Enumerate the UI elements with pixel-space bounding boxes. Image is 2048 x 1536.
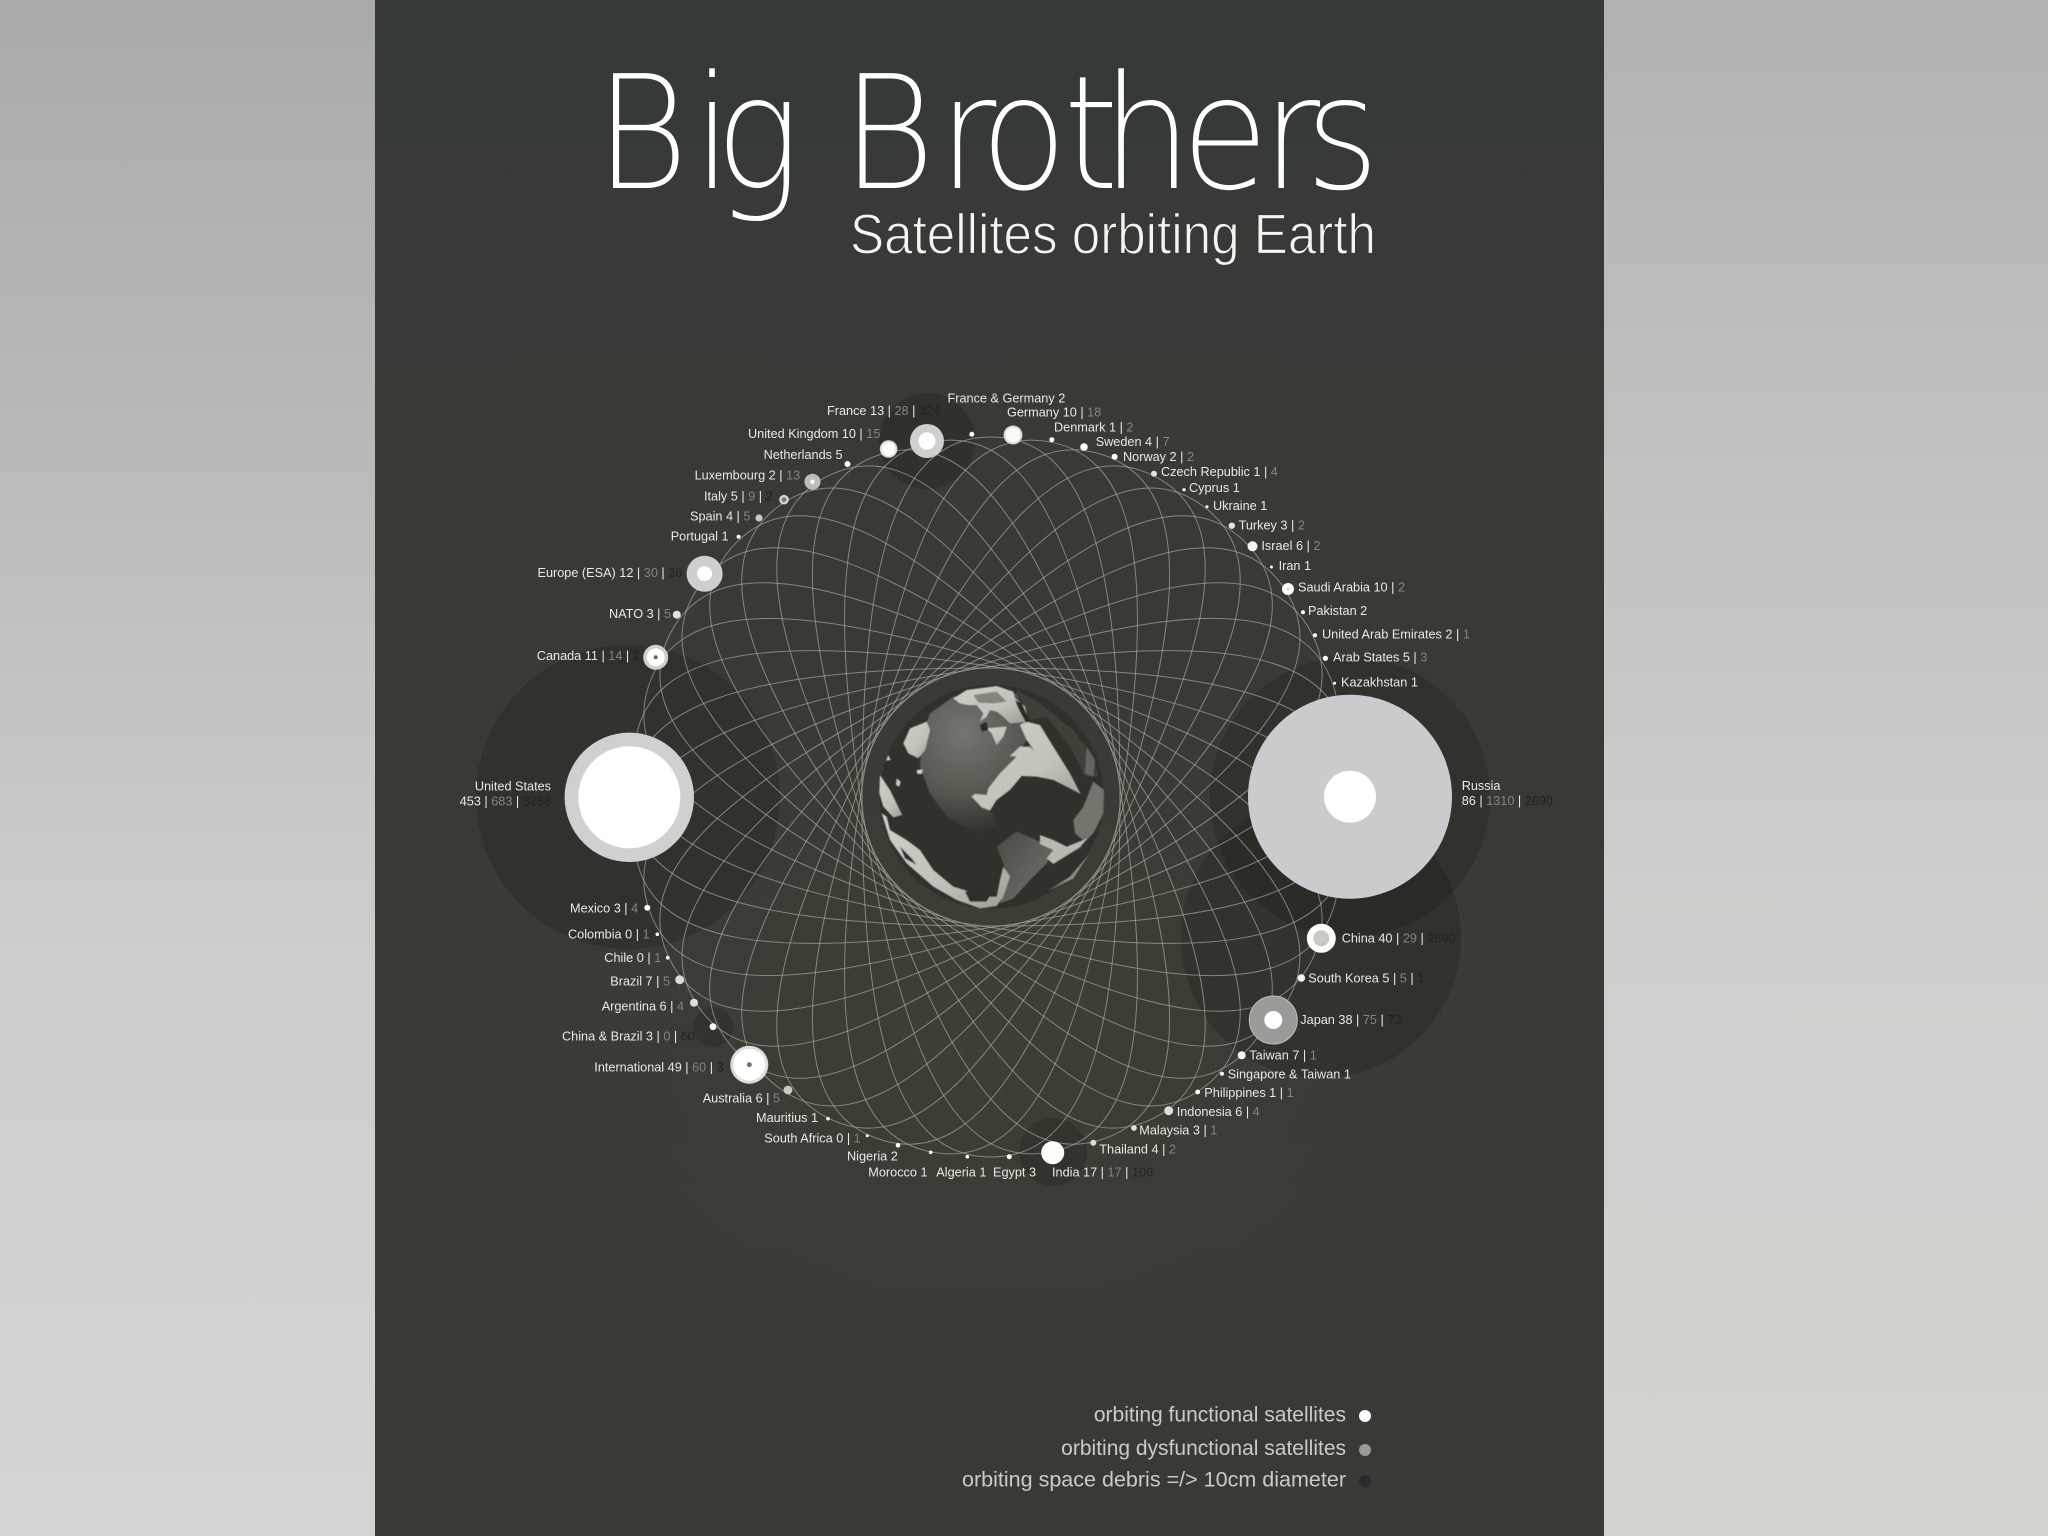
satellite: Singapore and Taiwan: Singapore & Taiwan 1 [1228, 1067, 1351, 1081]
satellite: Thailand: Thailand 4 | 2 [1099, 1142, 1176, 1156]
legend [962, 1404, 1371, 1492]
left backdrop [0, 0, 376, 1536]
satellite: India [1041, 1141, 1153, 1180]
satellite: China and Brazil [562, 1023, 716, 1044]
satellite: Algeria: Algeria 1 [936, 1166, 986, 1180]
title: Big Brothers [595, 41, 1380, 226]
earth globe [879, 685, 1104, 909]
panel glow [470, 580, 1510, 1420]
satellite: Japan: Japan 38 | 75 | 73 [1300, 1013, 1401, 1027]
satellite: International [594, 1046, 768, 1084]
satellite: NATO: NATO 3 | 5 [609, 607, 671, 621]
satellite: United Arab Emirates: United Arab Emirates 2 | 1 [1322, 627, 1470, 641]
satellite: Europe (ESA): Europe (ESA) 12 | 30 | 36 [538, 566, 682, 580]
satellite: Algeria [936, 1155, 986, 1180]
poster panel [375, 0, 1604, 1536]
satellite: China [1307, 924, 1456, 953]
satellite: Israel: Israel 6 | 2 [1261, 539, 1320, 553]
satellite: Brazil: Brazil 7 | 5 [610, 974, 670, 988]
legend: debris: orbiting space debris =/> 10cm diameter [962, 1469, 1346, 1492]
satellite: Nigeria [847, 1143, 900, 1163]
satellite: Colombia: Colombia 0 | 1 [568, 928, 650, 942]
satellite: Indonesia: Indonesia 6 | 4 [1177, 1105, 1260, 1119]
right backdrop [1603, 0, 2048, 1536]
satellite: Denmark: Denmark 1 | 2 [1054, 421, 1133, 435]
satellite: France and Germany: France & Germany 2 [948, 391, 1065, 405]
satellite: France and Germany [948, 391, 1065, 437]
satellite: United States [460, 733, 694, 862]
satellite: Luxembourg [695, 469, 820, 490]
satellite: United Kingdom: United Kingdom 10 | 15 [748, 427, 880, 441]
satellite: Canada [537, 645, 668, 670]
satellite: United Kingdom [748, 427, 897, 458]
satellite: Cyprus: Cyprus 1 [1189, 481, 1240, 495]
satellite: Portugal: Portugal 1 [671, 530, 729, 544]
satellite: China and Brazil: China & Brazil 3 | 0 | 60 [562, 1030, 695, 1044]
satellite: Russia: Russia [1462, 779, 1501, 793]
orbit rosette [609, 415, 1373, 1179]
satellite: Czech Republic: Czech Republic 1 | 4 [1161, 465, 1278, 479]
satellite: Saudi Arabia: Saudi Arabia 10 | 2 [1298, 580, 1405, 594]
satellite: Netherlands: Netherlands 5 [764, 448, 843, 462]
satellite: France [827, 404, 944, 458]
satellite: Mauritius: Mauritius 1 [756, 1111, 818, 1125]
satellite: Egypt [993, 1154, 1036, 1180]
satellite: South Korea: South Korea 5 | 5 | 1 [1308, 971, 1424, 985]
satellite: Arab States: Arab States 5 | 3 [1333, 650, 1427, 664]
satellite: Pakistan: Pakistan 2 [1308, 604, 1367, 618]
satellite: Denmark [1049, 421, 1133, 442]
satellite: Europe (ESA) [538, 556, 723, 592]
satellite: France: France 13 | 28 | 324 [827, 404, 940, 418]
satellite: Russia: 86 | 1310 | 2690 [1462, 794, 1553, 808]
satellite: China: China 40 | 29 | 2690 [1342, 932, 1456, 946]
satellite: Mexico: Mexico 3 | 4 [570, 901, 638, 915]
satellite: Sweden: Sweden 4 | 7 [1096, 435, 1170, 449]
satellite: Nigeria: Nigeria 2 [847, 1149, 898, 1163]
satellite: Russia [1248, 695, 1553, 899]
satellite: United States: United States [475, 780, 551, 794]
legend: functional: orbiting functional satellites [1094, 1404, 1346, 1427]
satellite: Philippines: Philippines 1 | 1 [1204, 1086, 1294, 1100]
satellite: Morocco [868, 1150, 932, 1180]
satellite: Turkey: Turkey 3 | 2 [1239, 518, 1305, 532]
satellite: International: International 49 | 60 | 3 [594, 1061, 724, 1075]
satellite: Taiwan: Taiwan 7 | 1 [1249, 1049, 1317, 1063]
satellite: Canada: Canada 11 | 14 | 2 [537, 649, 640, 663]
satellite: Malaysia: Malaysia 3 | 1 [1139, 1123, 1217, 1137]
subtitle: Satellites orbiting Earth [850, 202, 1376, 266]
satellite: Egypt: Egypt 3 [993, 1166, 1036, 1180]
satellite: Germany [1004, 406, 1101, 444]
debris circles [476, 393, 1490, 1186]
satellite: Chile: Chile 0 | 1 [604, 951, 661, 965]
satellite: Germany: Germany 10 | 18 [1007, 406, 1101, 420]
satellite: Australia: Australia 6 | 5 [703, 1091, 780, 1105]
satellite: Kazakhstan: Kazakhstan 1 [1341, 675, 1418, 689]
satellite: Luxembourg: Luxembourg 2 | 13 [695, 469, 800, 483]
satellite: Morocco: Morocco 1 [868, 1166, 928, 1180]
satellite: Iran: Iran 1 [1279, 559, 1311, 573]
satellite: Spain: Spain 4 | 5 [690, 510, 750, 524]
satellite: Argentina: Argentina 6 | 4 [602, 1000, 684, 1014]
satellite: Norway: Norway 2 | 2 [1123, 450, 1194, 464]
satellite: Australia [703, 1086, 792, 1105]
satellite: Ukraine: Ukraine 1 [1213, 499, 1267, 513]
satellite: Italy: Italy 5 | 9 | 2 [704, 490, 773, 504]
satellite: United States: 453 | 683 | 3258 [460, 795, 551, 809]
legend: dysfunctional: orbiting dysfunctional satellites [1061, 1437, 1346, 1460]
satellite: South Africa: South Africa 0 | 1 [764, 1132, 861, 1146]
satellite: Netherlands [764, 448, 850, 467]
satellite: Japan [1249, 996, 1401, 1044]
satellite: India: India 17 | 17 | 106 [1052, 1166, 1153, 1180]
